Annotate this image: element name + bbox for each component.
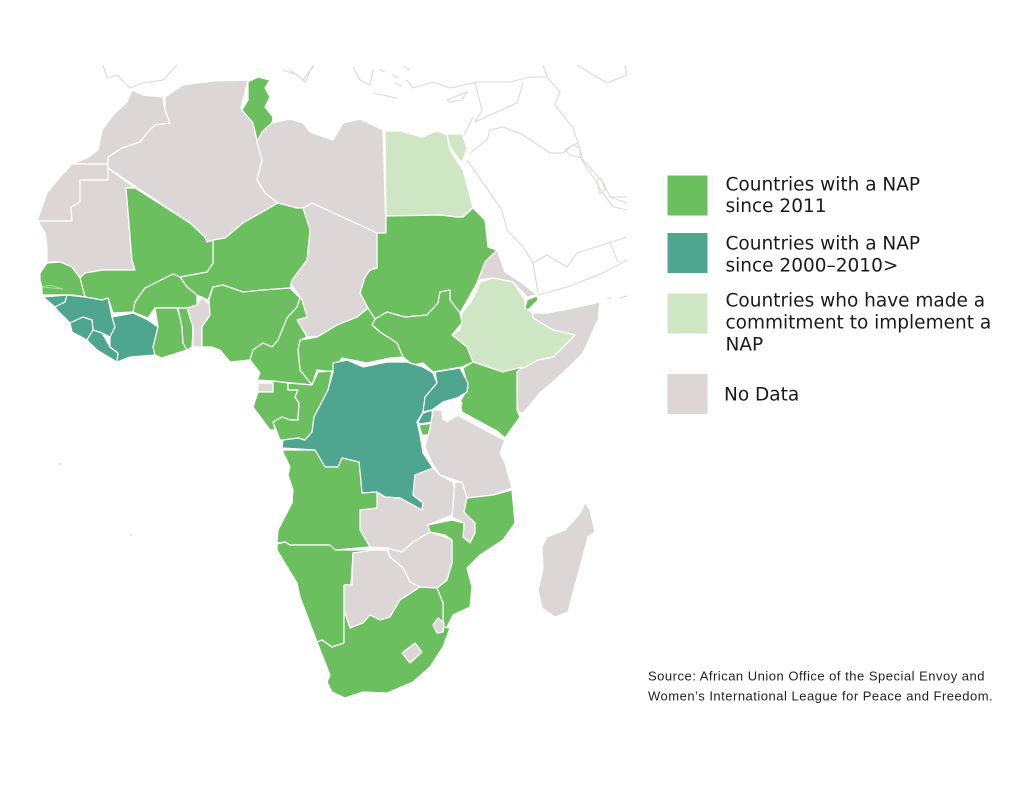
legend label: commitment: commitment to implement a — [726, 313, 991, 334]
country: Burkina Faso — [133, 274, 197, 318]
country: Mali — [80, 188, 213, 313]
country: Rwanda — [418, 410, 433, 424]
country: Malawi — [452, 482, 475, 543]
map: Gambia outline — [42, 285, 63, 289]
country: Ethiopia — [452, 278, 575, 372]
country: Sierra Leone — [70, 317, 93, 340]
country: Mozambique — [428, 490, 515, 628]
country: Guinea — [55, 295, 115, 337]
country: Chad — [290, 203, 377, 337]
country: Lesotho — [402, 643, 422, 663]
legend label: NAP since 2000-2010: since 2000–2010> — [726, 256, 898, 276]
country: Cameroon — [250, 288, 312, 385]
legend swatch: no data — [668, 374, 708, 414]
legend label: NAP since 2000-2010: Countries with a NAP — [726, 233, 920, 254]
map: Africa countries — [37, 77, 600, 698]
country: Zambia — [360, 468, 455, 552]
country: Democratic Republic of Congo — [282, 360, 437, 510]
country: Gabon — [253, 381, 299, 430]
country: South Sudan — [372, 290, 473, 372]
country: Western Sahara — [37, 164, 108, 221]
country: Namibia — [277, 542, 385, 647]
country: Libya — [257, 119, 386, 233]
map: neighbouring regions outline — [103, 65, 627, 299]
country: Egypt, Sinai — [447, 134, 467, 163]
country: Guinea-Bissau — [43, 295, 67, 307]
country: Mauritania — [38, 168, 135, 278]
country: Tanzania — [425, 410, 512, 498]
country: Egypt — [385, 131, 473, 217]
legend label: commitment: NAP — [726, 335, 763, 356]
country: Madagascar — [538, 502, 595, 617]
country: Angola — [277, 450, 377, 550]
country: Burundi — [419, 423, 433, 435]
source note: Source: African Union Office of the Special Envoy and — [648, 669, 985, 684]
legend label: NAP since 2011: since 2011 — [726, 196, 827, 217]
country: Ghana — [153, 308, 187, 358]
country: Equatorial Guinea — [258, 383, 273, 392]
legend label: no data: No Data — [724, 385, 799, 406]
country: Algeria — [108, 80, 278, 242]
country: Central African Republic — [298, 308, 403, 385]
country: Togo — [178, 308, 193, 350]
legend label: commitment: Countries who have made a — [726, 291, 985, 312]
country: Benin — [187, 297, 210, 347]
country: Somalia — [517, 302, 600, 413]
country: Senegal and Gambia — [40, 262, 85, 297]
map: small islands — [59, 463, 132, 536]
country: Djibouti — [525, 296, 538, 310]
country: Ivory Coast — [110, 313, 158, 362]
country: Sudan — [360, 208, 497, 319]
legend swatch: commitment — [668, 294, 708, 334]
legend swatch: NAP since 2011 — [668, 176, 708, 216]
legend label: NAP since 2011: Countries with a NAP — [726, 175, 920, 196]
country: Niger — [180, 203, 310, 300]
country: Swaziland — [433, 618, 444, 633]
lake: Victoria — [442, 398, 462, 422]
country: Eritrea — [477, 250, 537, 297]
country: Kenya — [460, 362, 522, 438]
country: Botswana — [344, 550, 420, 628]
country: Tunisia — [242, 77, 273, 142]
country: Morocco — [72, 90, 170, 164]
legend swatch: NAP since 2000-2010 — [668, 233, 708, 273]
country: Uganda — [423, 368, 468, 412]
country: Zimbabwe — [387, 532, 452, 588]
country: Republic of Congo — [273, 371, 332, 440]
country: South Africa — [317, 587, 450, 698]
country: Nigeria — [202, 285, 300, 362]
country: Liberia — [87, 330, 118, 362]
source note: Women’s International League for Peace and Freedom. — [648, 689, 993, 704]
